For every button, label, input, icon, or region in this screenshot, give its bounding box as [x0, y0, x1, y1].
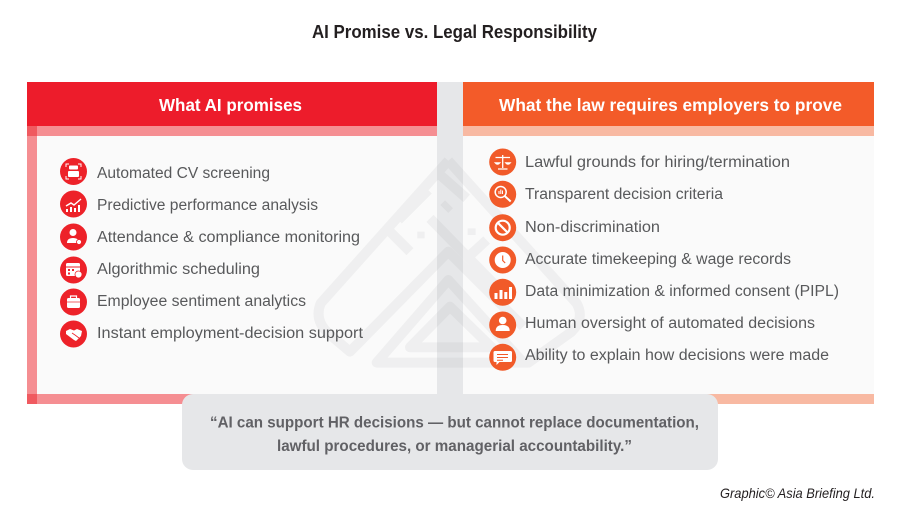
callout quote	[182, 394, 718, 470]
item: data minimization: Data minimization & informed consent (PIPL)	[525, 283, 839, 300]
heading: what the law requires	[463, 82, 874, 126]
item: predictive performance analysis	[60, 190, 318, 218]
callout quote: “AI can support HR decisions — but cannot replace documentation,	[210, 414, 699, 432]
watermark logo	[319, 161, 580, 363]
centre divider	[437, 82, 463, 395]
callout quote: lawful procedures, or managerial accountability.”	[277, 438, 632, 455]
item: transparent decision criteria: Transparent decision criteria	[525, 186, 723, 203]
item: lawful grounds: Lawful grounds for hiring/termination	[525, 154, 790, 171]
item: automated CV screening	[60, 158, 270, 185]
item: transparent decision criteria	[489, 181, 723, 208]
item: attendance and compliance monitoring	[60, 224, 360, 250]
heading: what AI promises	[27, 82, 437, 126]
heading: what the law requires: What the law requires employers to prove	[499, 95, 842, 115]
right list	[489, 148, 839, 371]
item: algorithmic scheduling	[60, 256, 260, 284]
item: automated CV screening: Automated CV screening	[97, 165, 270, 182]
item: human oversight	[489, 312, 815, 338]
item: predictive performance analysis: Predictive performance analysis	[97, 197, 318, 214]
panel: what AI promises	[27, 82, 437, 404]
item: non-discrimination	[489, 214, 660, 241]
heading: what AI promises: What AI promises	[159, 95, 302, 115]
item: employee sentiment analytics	[60, 288, 306, 316]
item: accurate timekeeping: Accurate timekeeping & wage records	[525, 251, 791, 268]
item: lawful grounds	[489, 148, 790, 176]
item: data minimization	[489, 279, 839, 306]
item: instant employment-decision support	[60, 320, 364, 348]
item: attendance and compliance monitoring: Attendance & compliance monitoring	[97, 229, 360, 246]
item: algorithmic scheduling: Algorithmic scheduling	[97, 261, 260, 278]
item: human oversight: Human oversight of automated decisions	[525, 315, 815, 332]
item: ability to explain: Ability to explain how decisions were made	[525, 347, 829, 364]
item: employee sentiment analytics: Employee sentiment analytics	[97, 293, 306, 310]
item: accurate timekeeping	[489, 246, 791, 274]
item: non-discrimination: Non-discrimination	[525, 219, 660, 236]
left list	[60, 158, 364, 348]
title: AI Promise vs. Legal Responsibility	[312, 22, 597, 42]
item: instant employment-decision support: Instant employment-decision support	[97, 325, 364, 342]
item: ability to explain	[489, 344, 829, 371]
credit: Graphic© Asia Briefing Ltd.	[720, 485, 875, 501]
panel: what the law requires	[463, 82, 874, 404]
